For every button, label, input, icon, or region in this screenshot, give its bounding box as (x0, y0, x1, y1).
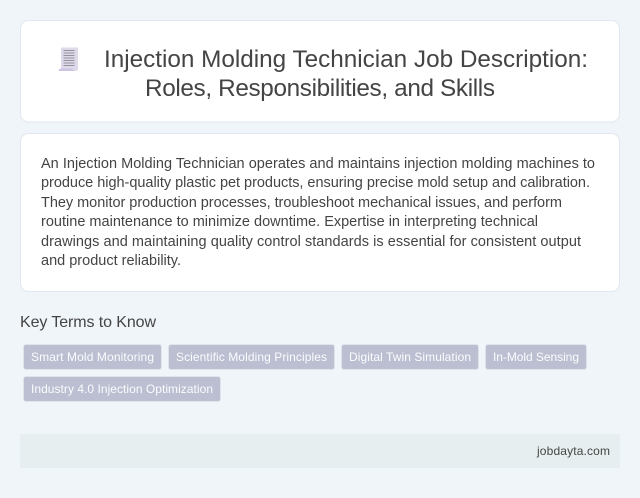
tag: smart mold monitoring: Smart Mold Monitoring (31, 350, 154, 364)
tag: smart mold monitoring (24, 344, 162, 370)
panel: description card (20, 134, 620, 292)
description text: drawings and maintaining quality control standards is essential for consistent output (41, 234, 581, 250)
icon: document scroll (58, 48, 78, 71)
title: Roles, Responsibilities, and Skills (145, 75, 495, 102)
panel: title card (20, 20, 620, 122)
description text: and product reliability. (41, 253, 181, 269)
tag: digital twin simulation (342, 344, 478, 370)
tag: industry 4.0 injection optimization (24, 376, 220, 402)
tag: in-mold sensing (486, 344, 586, 370)
description text: produce high-quality plastic pet products, ensuring precise mold setup and calibration. (41, 175, 590, 191)
description text (41, 156, 595, 269)
description text: An Injection Molding Technician operates and maintains injection molding machines to (41, 156, 595, 172)
tag: in-mold sensing: In-Mold Sensing (493, 350, 579, 364)
tag: digital twin simulation: Digital Twin Simulation (349, 350, 471, 364)
tag: scientific molding principles (168, 344, 334, 370)
tag: scientific molding principles: Scientific Molding Principles (176, 350, 327, 364)
title (104, 46, 588, 102)
tag: industry 4.0 injection optimization: Industry 4.0 Injection Optimization (31, 382, 213, 396)
footer bar (20, 434, 620, 468)
description text: routine maintenance to minimize downtime. Expertise in interpreting technical (41, 214, 538, 230)
title: Injection Molding Technician Job Description: (104, 46, 588, 73)
description text: They monitor production processes, troubleshoot mechanical issues, and perform (41, 195, 562, 211)
heading: key terms: Key Terms to Know (20, 314, 156, 331)
footer source text: jobdayta.com (536, 444, 610, 458)
